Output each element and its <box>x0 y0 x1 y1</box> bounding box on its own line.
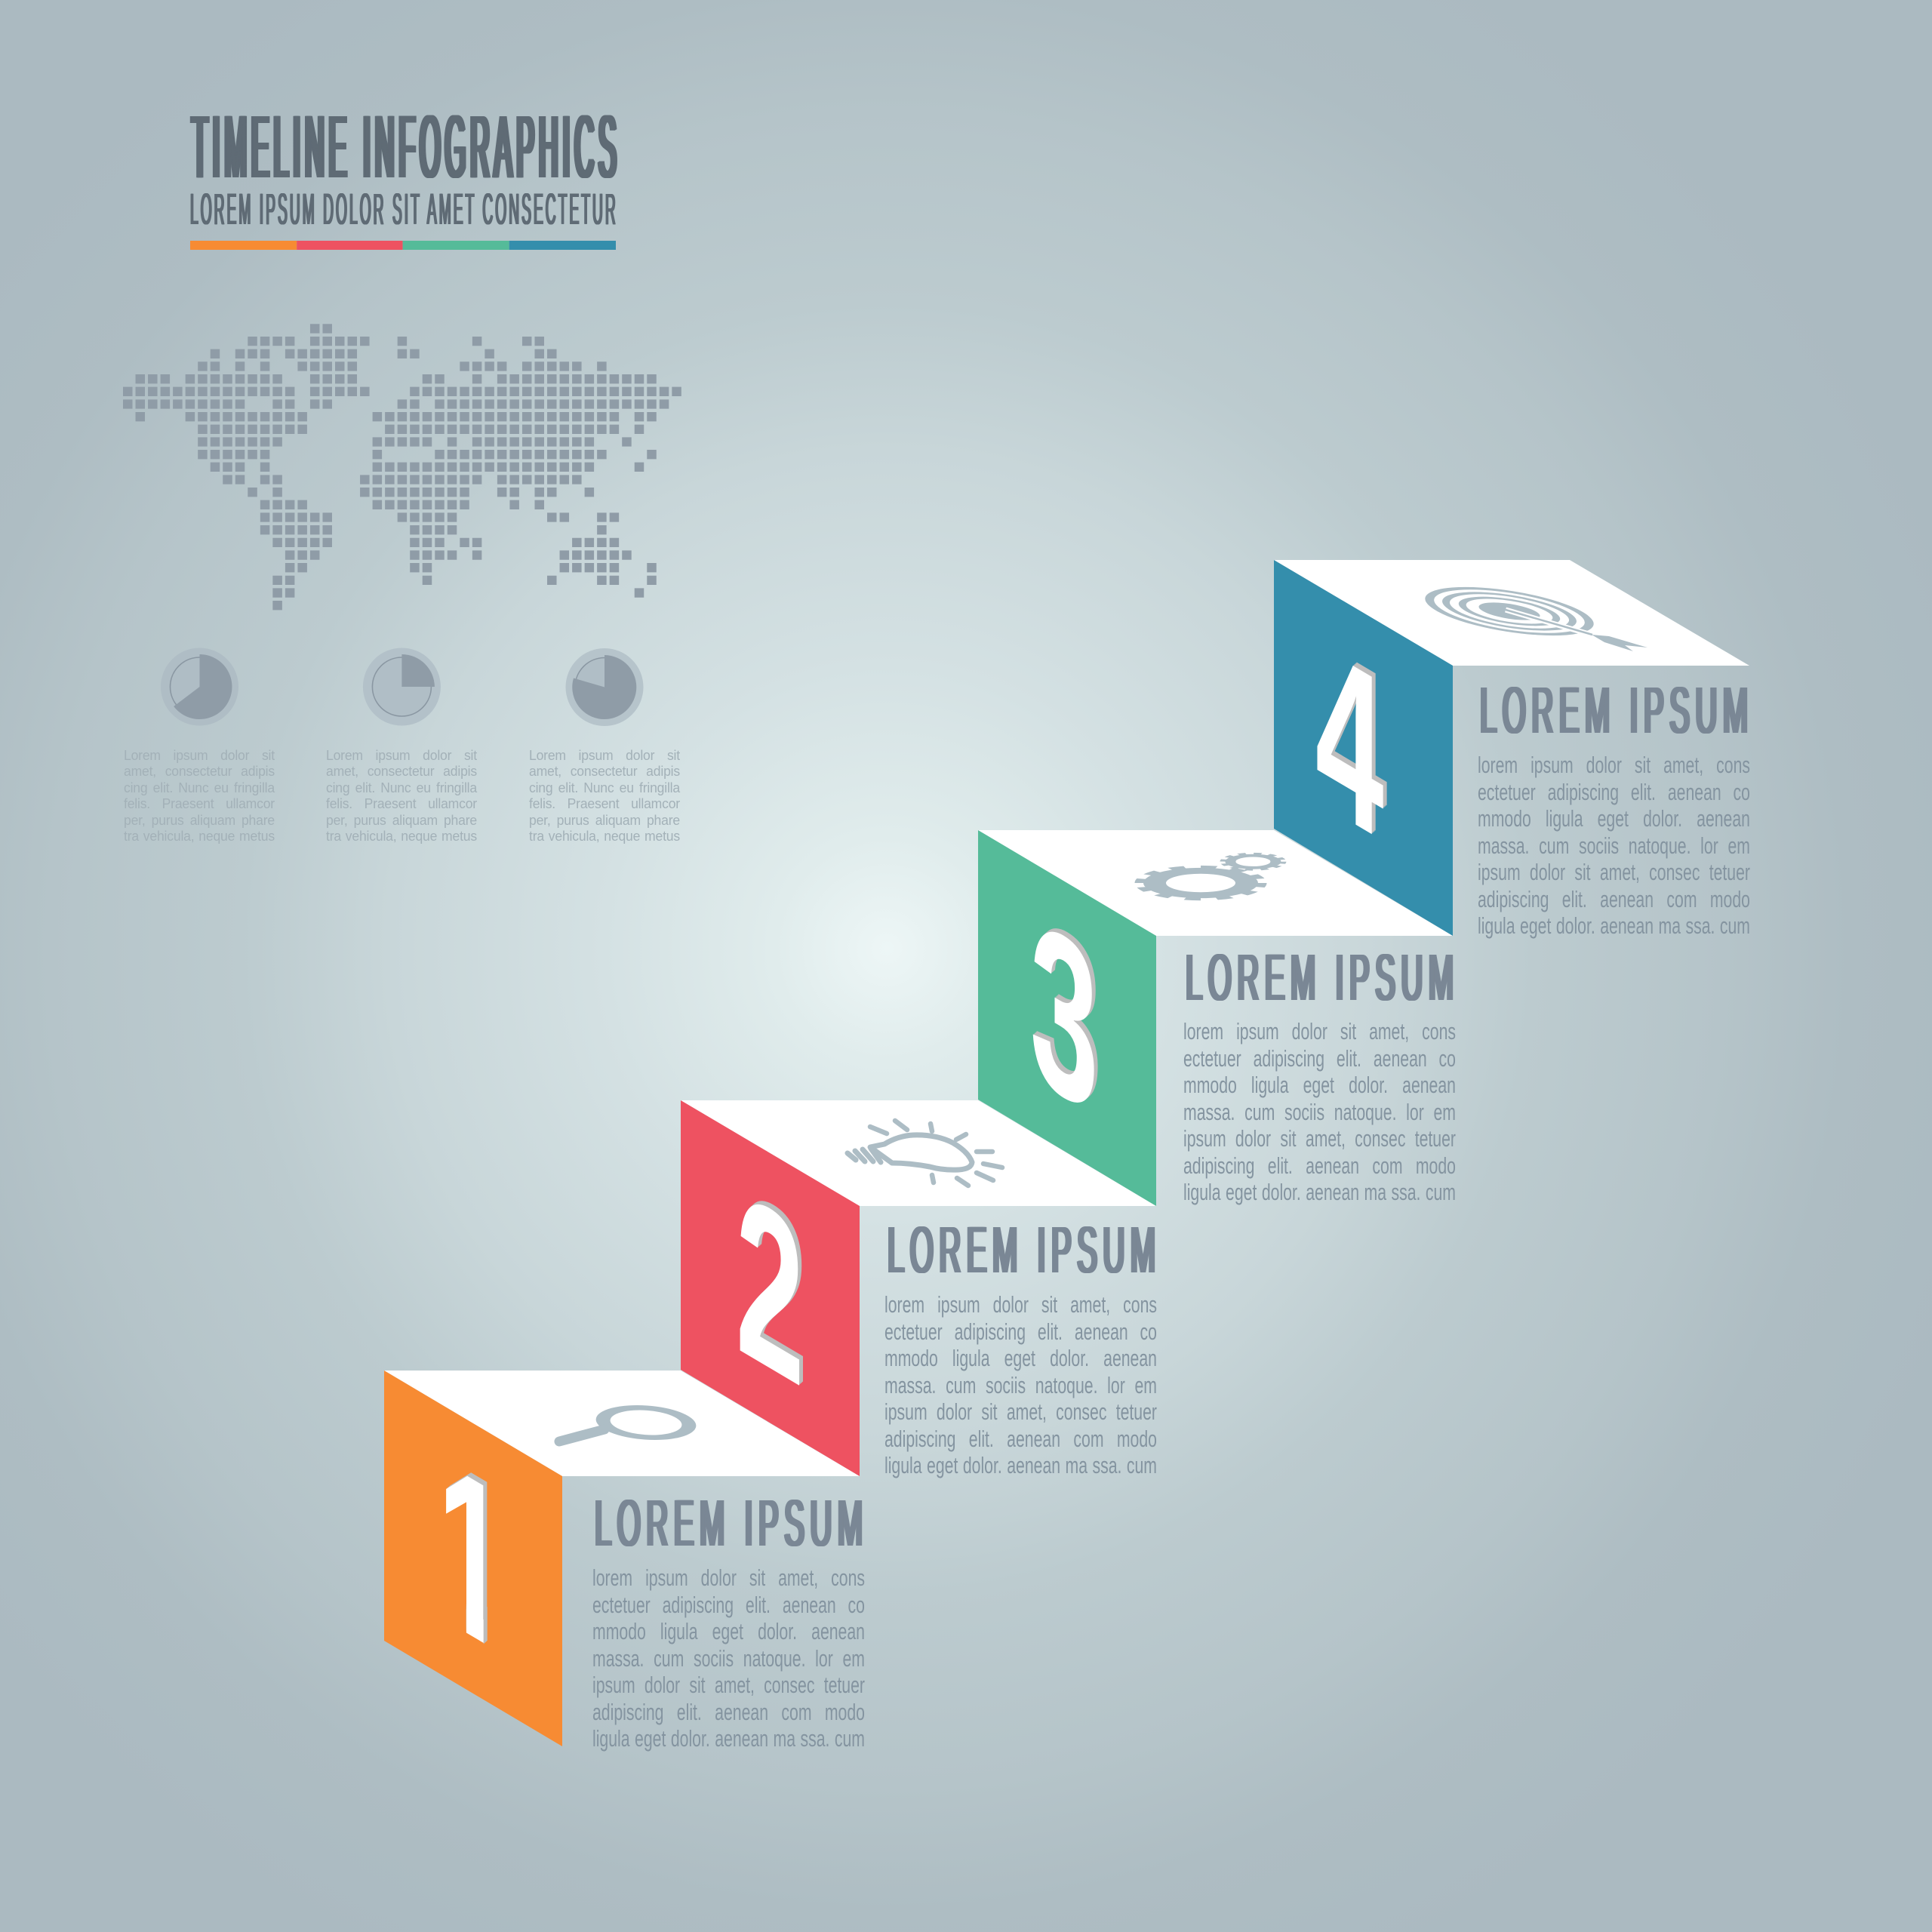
number 1 extrusion foot <box>484 1607 488 1644</box>
step 1 body text: ipsum dolor sit amet, consec tetuer <box>592 1672 865 1698</box>
step 4 heading: LOREM IPSUM <box>1479 674 1753 747</box>
pie caption 2: amet, consectetur adipis <box>326 763 477 779</box>
step 3 body text <box>1183 1018 1456 1205</box>
number 3: 3 <box>1030 869 1098 1165</box>
step 2 body text: ligula eget dolor. aenean ma ssa. cum <box>884 1452 1157 1478</box>
step 1 top face <box>384 1371 860 1476</box>
number 1: 1 <box>438 1410 506 1706</box>
step 4 body text: ligula eget dolor. aenean ma ssa. cum <box>1478 912 1750 939</box>
step 4 body text: ipsum dolor sit amet, consec tetuer <box>1478 859 1750 885</box>
pie chart 1 <box>161 648 238 726</box>
pie chart 3 <box>566 648 643 726</box>
step 2 top face <box>681 1100 1156 1206</box>
pie caption 2: cing elit. Nunc eu fringilla <box>326 780 477 795</box>
step 3 body text: lorem ipsum dolor sit amet, cons <box>1183 1018 1456 1044</box>
pie caption 3 <box>529 747 681 844</box>
icon: light bulb <box>848 1121 1002 1186</box>
step 3 body text: ectetuer adipiscing elit. aenean co <box>1183 1045 1456 1072</box>
pie caption 1: felis. Praesent ullamcor <box>124 795 275 811</box>
step 2 heading: LOREM IPSUM <box>888 1214 1161 1287</box>
step 1 heading: LOREM IPSUM <box>595 1487 868 1560</box>
dotted world map <box>123 324 681 610</box>
step 3 body text: mmodo ligula eget dolor. aenean <box>1183 1072 1456 1098</box>
pie caption 1: tra vehicula, neque metus <box>124 828 275 844</box>
title: TIMELINE INFOGRAPHICS <box>192 97 621 197</box>
pie caption 3: per, purus aliquam phare <box>529 812 680 828</box>
step 3 heading: LOREM IPSUM <box>1185 941 1459 1014</box>
step 3 body text: adipiscing elit. aenean com modo <box>1183 1152 1456 1179</box>
pie caption 1: per, purus aliquam phare <box>124 812 275 828</box>
pie caption 3: felis. Praesent ullamcor <box>529 795 680 811</box>
number 4: 4 <box>1315 595 1383 891</box>
step 1 body text: lorem ipsum dolor sit amet, cons <box>592 1564 865 1591</box>
icon: gears <box>1140 854 1283 899</box>
icon: magnifying glass <box>559 1405 690 1441</box>
step 3 body text: ligula eget dolor. aenean ma ssa. cum <box>1183 1179 1456 1205</box>
step 3 top face <box>978 830 1453 936</box>
pie chart 2 <box>363 648 441 726</box>
pie caption 3: cing elit. Nunc eu fringilla <box>529 780 680 795</box>
step 1 body text <box>592 1564 865 1752</box>
step 4 body text: ectetuer adipiscing elit. aenean co <box>1478 779 1750 805</box>
pie caption 3: tra vehicula, neque metus <box>529 828 680 844</box>
step 1 orange face <box>384 1371 562 1746</box>
step 4 body text: lorem ipsum dolor sit amet, cons <box>1478 752 1750 778</box>
pie caption 1: cing elit. Nunc eu fringilla <box>124 780 275 795</box>
step 2 body text: ectetuer adipiscing elit. aenean co <box>884 1318 1157 1345</box>
step 4 blue face <box>1274 560 1453 936</box>
step 4 body text: mmodo ligula eget dolor. aenean <box>1478 805 1750 832</box>
colour bar <box>190 241 616 250</box>
step 4 body text: massa. cum sociis natoque. lor em <box>1478 832 1750 859</box>
step 2 body text: mmodo ligula eget dolor. aenean <box>884 1345 1157 1371</box>
step 2 body text: ipsum dolor sit amet, consec tetuer <box>884 1398 1157 1425</box>
step 1 body text: mmodo ligula eget dolor. aenean <box>592 1618 865 1644</box>
pie caption 1 <box>124 747 275 844</box>
pie caption 1: Lorem ipsum dolor sit <box>124 747 275 763</box>
step 2 red face <box>681 1100 860 1476</box>
step 2 body text: massa. cum sociis natoque. lor em <box>884 1372 1157 1398</box>
pie caption 3: amet, consectetur adipis <box>529 763 680 779</box>
subtitle: LOREM IPSUM DOLOR SIT AMET CONSECTETUR <box>190 185 618 234</box>
number 2: 2 <box>736 1142 804 1438</box>
step 1 body text: massa. cum sociis natoque. lor em <box>592 1645 865 1672</box>
step 1 body text: ectetuer adipiscing elit. aenean co <box>592 1592 865 1618</box>
step 3 body text: ipsum dolor sit amet, consec tetuer <box>1183 1125 1456 1152</box>
pie caption 2: felis. Praesent ullamcor <box>326 795 477 811</box>
step 2 body text: adipiscing elit. aenean com modo <box>884 1426 1157 1452</box>
pie caption 2 <box>326 747 477 844</box>
pie caption 2: tra vehicula, neque metus <box>326 828 477 844</box>
pie caption 2: per, purus aliquam phare <box>326 812 477 828</box>
icon: target with arrow <box>1426 580 1647 651</box>
pie caption 3: Lorem ipsum dolor sit <box>529 747 680 763</box>
step 3 body text: massa. cum sociis natoque. lor em <box>1183 1099 1456 1125</box>
step 4 top face <box>1274 560 1749 666</box>
step 4 body text <box>1478 752 1750 939</box>
step 2 body text: lorem ipsum dolor sit amet, cons <box>884 1291 1157 1318</box>
pie caption 1: amet, consectetur adipis <box>124 763 275 779</box>
pie caption 2: Lorem ipsum dolor sit <box>326 747 477 763</box>
step 1 body text: adipiscing elit. aenean com modo <box>592 1699 865 1725</box>
step 2 body text <box>884 1291 1157 1478</box>
step 4 body text: adipiscing elit. aenean com modo <box>1478 886 1750 912</box>
step 1 body text: ligula eget dolor. aenean ma ssa. cum <box>592 1725 865 1752</box>
step 3 green face <box>978 830 1156 1206</box>
